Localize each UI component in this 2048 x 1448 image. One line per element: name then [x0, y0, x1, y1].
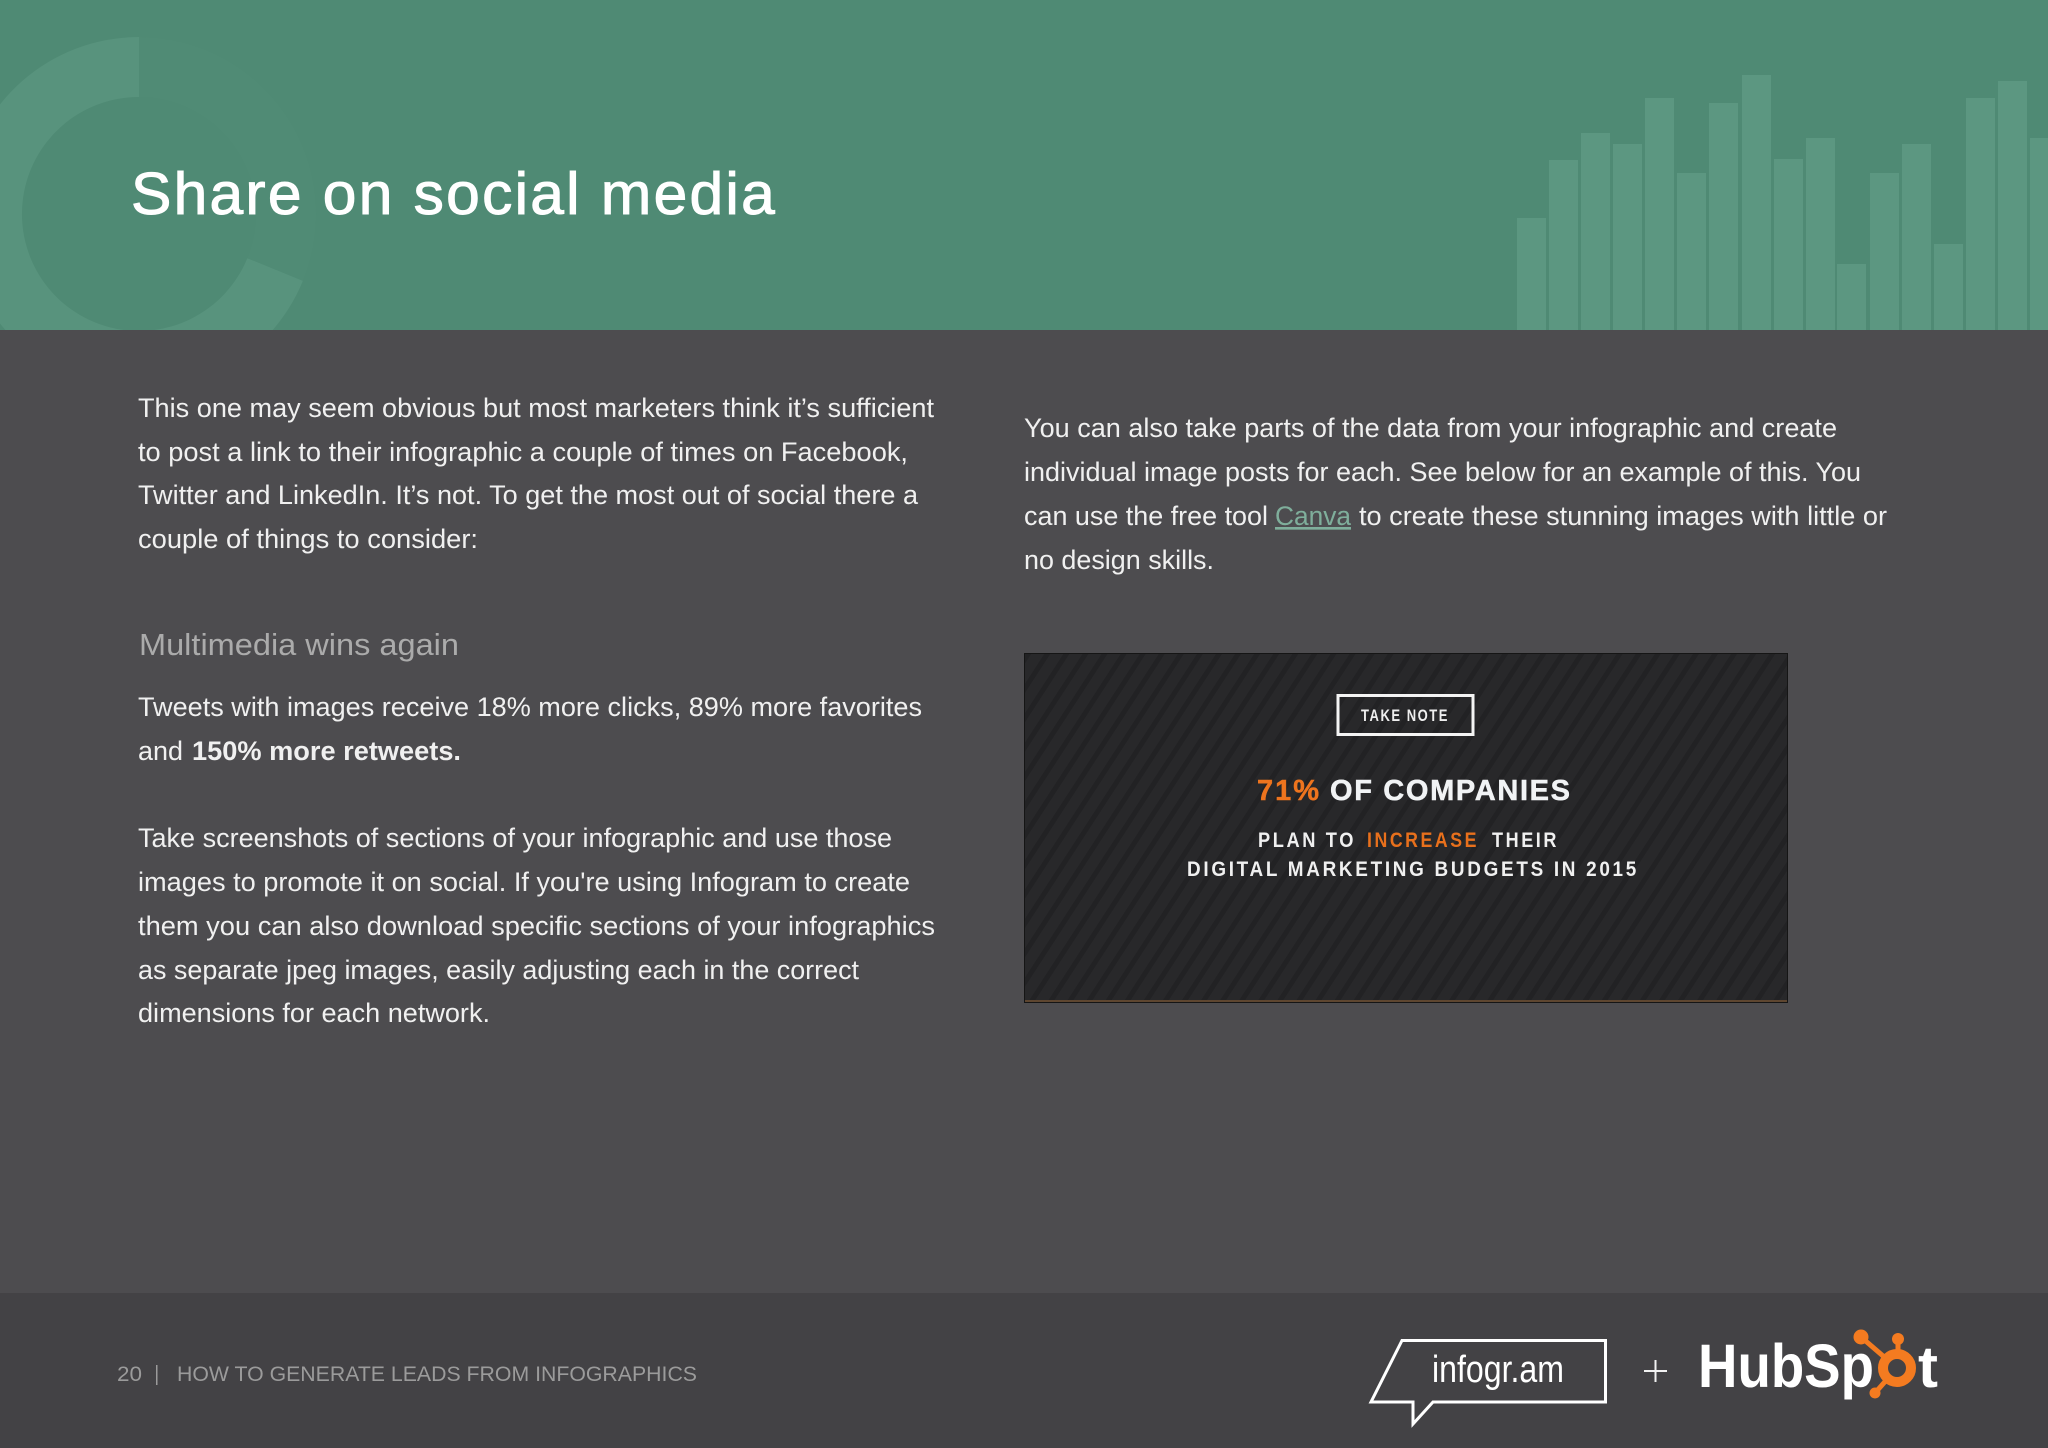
text block: screenshots advice: as separate jpeg images, easily adjusting each in the correct	[138, 955, 860, 985]
text block: screenshots advice: images to promote it on social. If you're using Infogram to create	[138, 867, 910, 897]
decorative bar chart	[1517, 75, 2048, 330]
text block: left column introduction: to post a link to their infographic a couple of times on Facebook,	[138, 437, 908, 467]
text block: tweet statistics: Tweets with images receive 18% more clicks, 89% more favorites	[138, 692, 922, 722]
statistic description: PLAN TO	[1258, 829, 1356, 852]
text block: right column: to create these stunning images with little or	[1359, 501, 1887, 531]
text block: right column: individual image posts for each. See below for an example of this. You	[1024, 457, 1861, 487]
text block: right column	[1024, 413, 1887, 575]
text block: tweet statistics	[138, 692, 922, 766]
text block: left column introduction: Twitter and LinkedIn. It’s not. To get the most out of social there a	[138, 480, 918, 510]
text block: right column: can use the free tool	[1024, 501, 1268, 531]
statistic description	[1187, 829, 1639, 881]
panel: footer	[0, 1293, 2048, 1448]
panel: example image post	[1024, 653, 1788, 1003]
badge: take note: TAKE NOTE	[1361, 706, 1449, 725]
text block: tweet statistics: and	[138, 736, 183, 766]
statistic headline: OF COMPANIES	[1330, 775, 1570, 807]
text block: screenshots advice: Take screenshots of sections of your infographic and use those	[138, 823, 892, 853]
badge: take note	[1338, 696, 1473, 734]
logo: infogr.am	[1371, 1340, 1606, 1424]
link: Canva: Canva	[1275, 501, 1351, 531]
text block: right column: You can also take parts of the data from your infographic and create	[1024, 413, 1837, 443]
panel: green header	[0, 0, 2048, 330]
text block: screenshots advice	[138, 823, 935, 1028]
text block: tweet statistics: 150% more retweets.	[192, 736, 461, 766]
statistic description: DIGITAL MARKETING BUDGETS IN 2015	[1187, 858, 1639, 881]
text block: right column: no design skills.	[1024, 545, 1214, 575]
text block: screenshots advice: dimensions for each network.	[138, 998, 490, 1028]
text block: left column introduction: This one may seem obvious but most marketers think it’s sufficient	[138, 393, 935, 423]
page number and document title: 20	[117, 1363, 142, 1386]
plus sign	[1644, 1360, 1667, 1382]
statistic description: THEIR	[1492, 829, 1559, 852]
page number and document title: HOW TO GENERATE LEADS FROM INFOGRAPHICS	[177, 1363, 697, 1386]
title: Share on social media	[131, 161, 777, 227]
subheading: Multimedia wins again: Multimedia wins again	[139, 627, 459, 662]
icon: HubSpot sprocket	[1854, 1330, 1911, 1398]
statistic headline: 71%	[1257, 775, 1319, 807]
text block: left column introduction	[138, 393, 935, 554]
statistic description: INCREASE	[1367, 829, 1479, 852]
logo: HubSpot: t	[1918, 1335, 1938, 1400]
decorative donut chart	[0, 37, 302, 330]
logo: HubSpot: HubSp	[1698, 1332, 1874, 1400]
text block: screenshots advice: them you can also download specific sections of your infographics	[138, 911, 935, 941]
text block: left column introduction: couple of things to consider:	[138, 524, 478, 554]
logo: infogr.am: infogr.am	[1432, 1349, 1564, 1391]
